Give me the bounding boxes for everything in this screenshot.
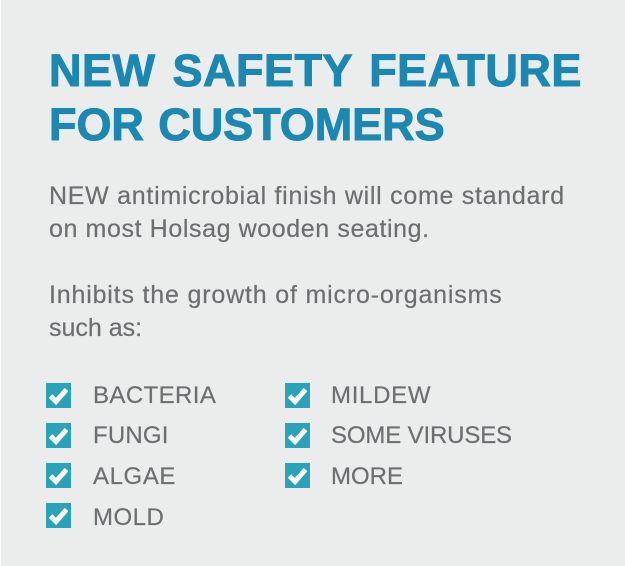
item: mold bbox=[46, 503, 164, 531]
item: some viruses: SOME VIRUSES bbox=[331, 422, 512, 449]
checklist: right column bbox=[285, 382, 512, 490]
item: fungi: FUNGI bbox=[93, 422, 169, 449]
text block: inhibits growth bbox=[49, 281, 503, 342]
title: FOR CUSTOMERS bbox=[49, 99, 445, 150]
item: bacteria: BACTERIA bbox=[93, 382, 216, 409]
item: more bbox=[285, 463, 403, 490]
text block: antimicrobial finish: on most Holsag wooden seating. bbox=[49, 215, 430, 243]
item: mold: MOLD bbox=[93, 504, 164, 531]
item: more: MORE bbox=[331, 463, 403, 490]
text block: antimicrobial finish: NEW antimicrobial finish will come standard bbox=[49, 182, 565, 210]
item: algae bbox=[46, 463, 176, 490]
title: NEW SAFETY FEATURE bbox=[49, 45, 582, 96]
item: algae: ALGAE bbox=[93, 463, 176, 490]
checklist: left column bbox=[46, 382, 216, 531]
text block: inhibits growth: Inhibits the growth of micro-organisms bbox=[49, 281, 503, 309]
title bbox=[49, 45, 582, 150]
item: fungi bbox=[46, 422, 169, 449]
item: mildew bbox=[285, 382, 431, 409]
text block: inhibits growth: such as: bbox=[49, 314, 142, 342]
text block: antimicrobial finish bbox=[49, 182, 565, 243]
item: mildew: MILDEW bbox=[331, 382, 431, 409]
